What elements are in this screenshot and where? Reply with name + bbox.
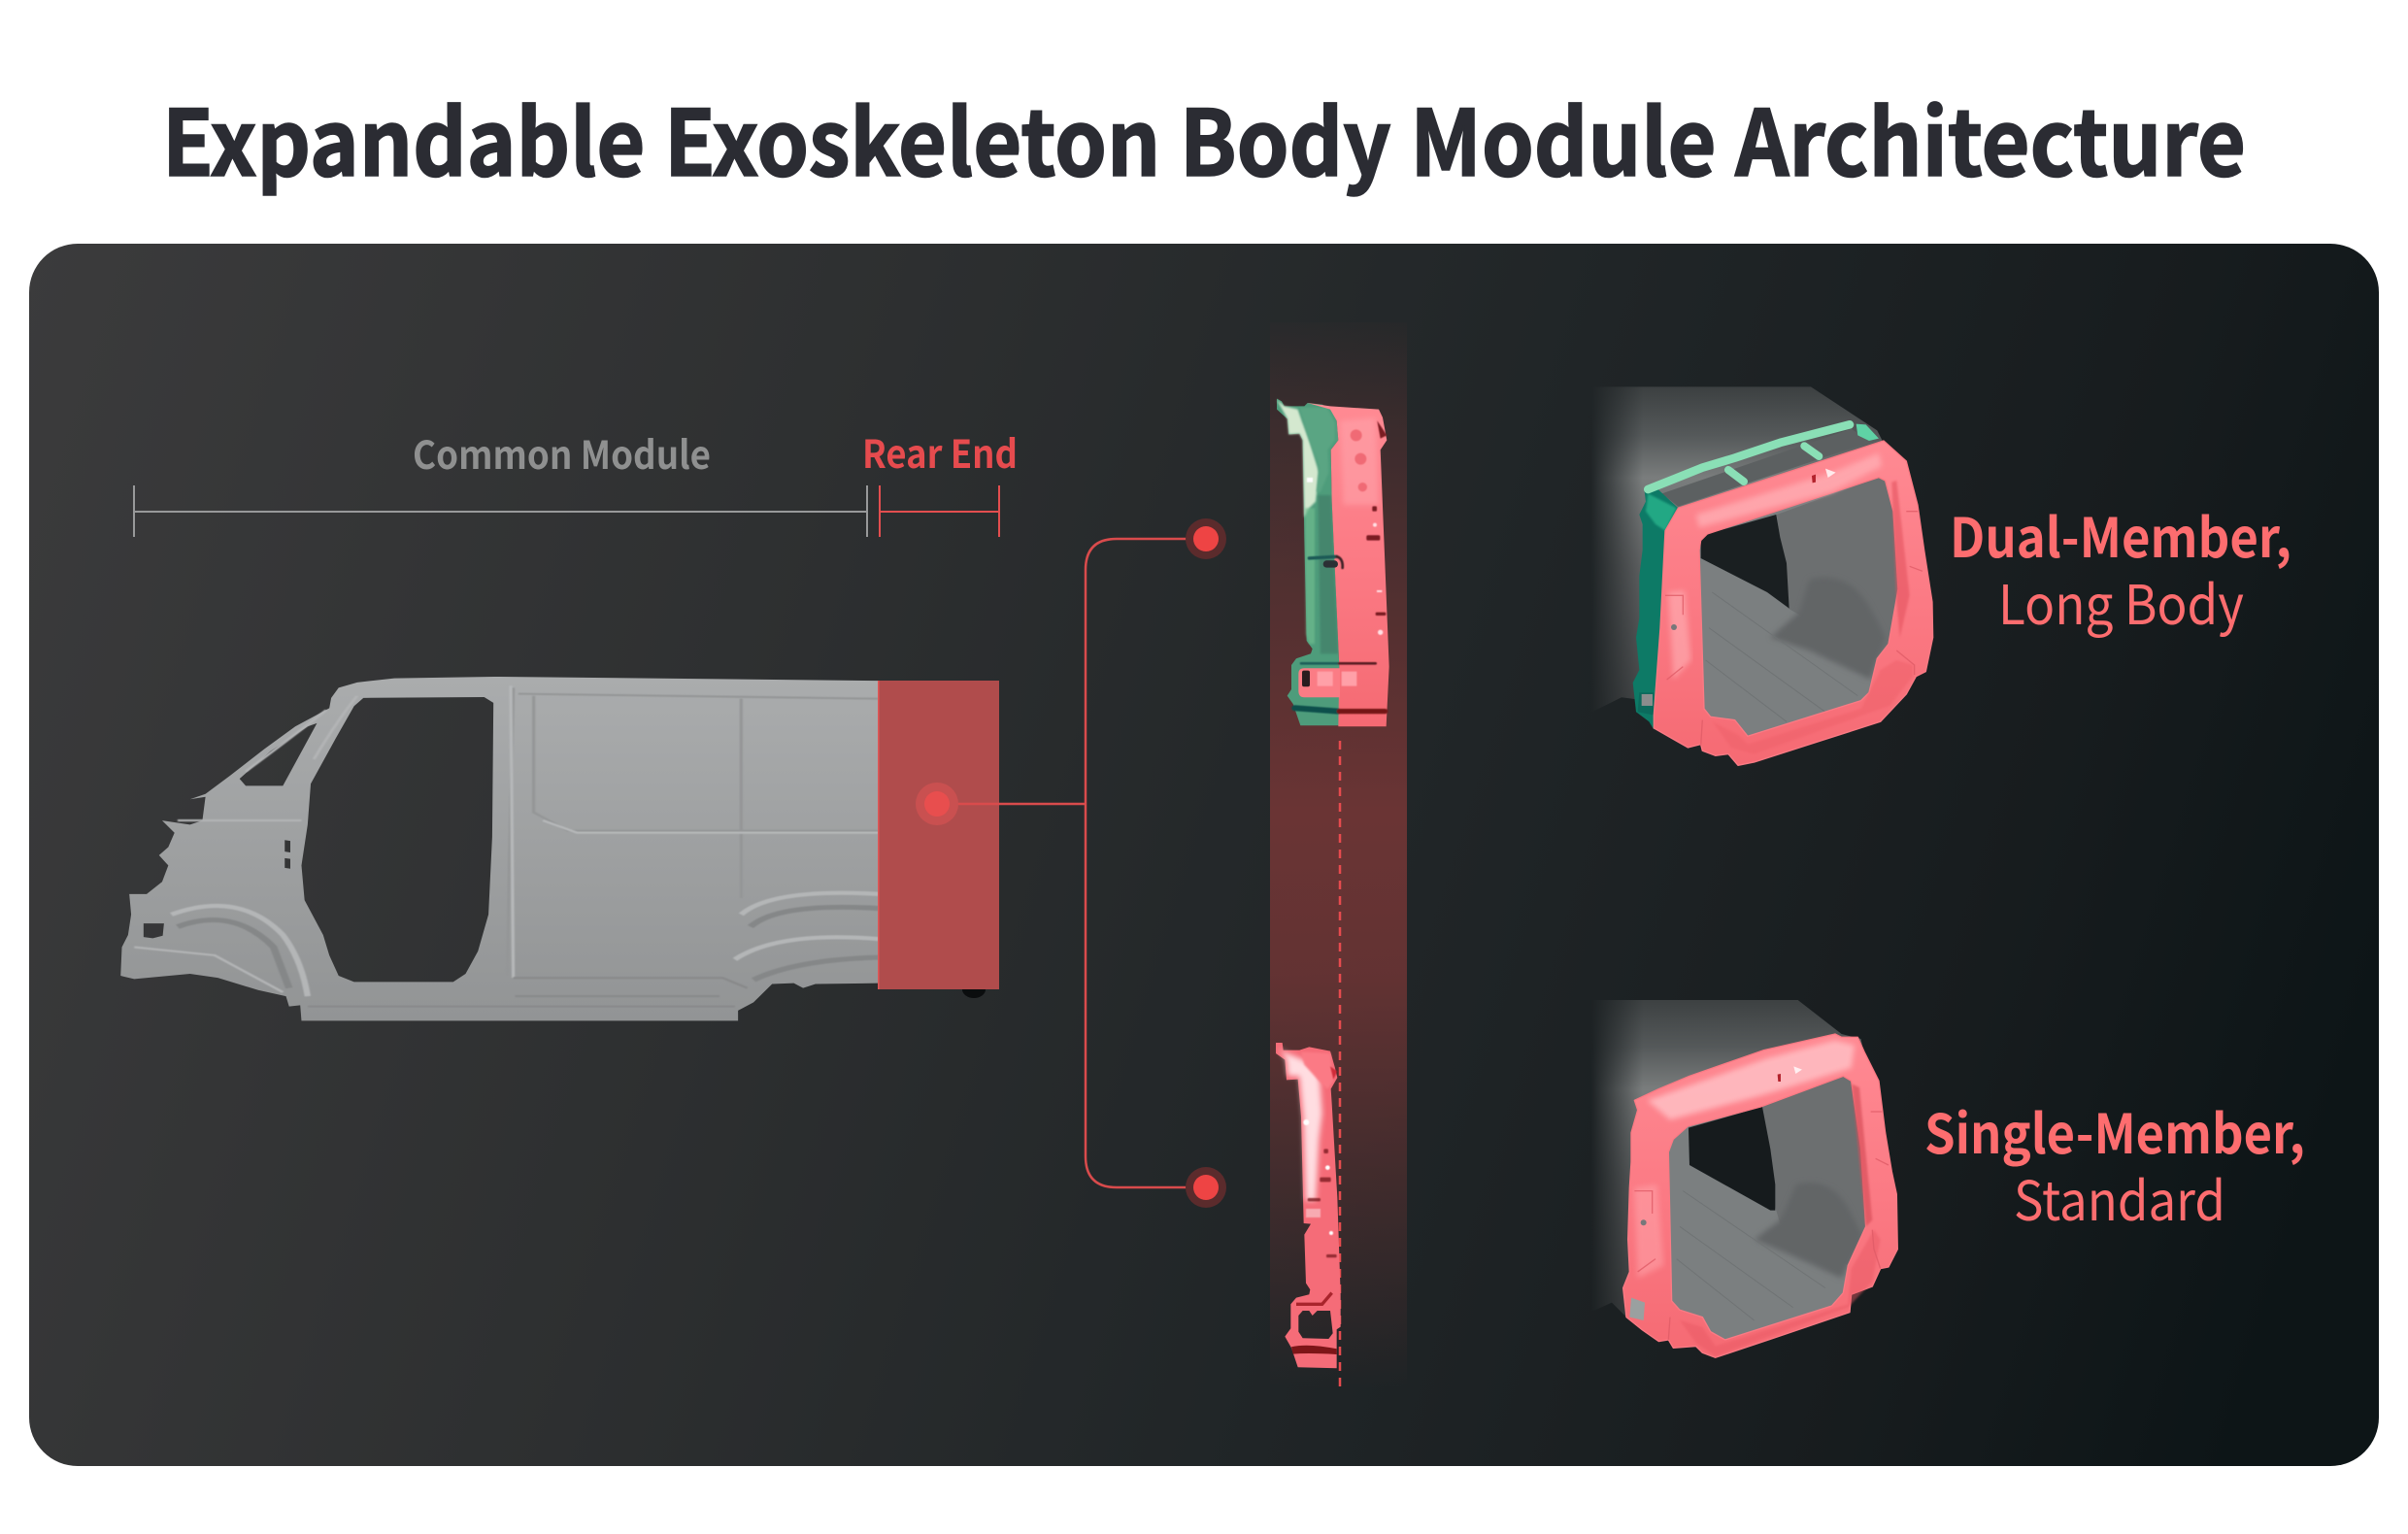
panel: dark background xyxy=(29,244,2379,1466)
rear frame: single member, standard xyxy=(1590,1000,1897,1357)
bracket: common module xyxy=(134,485,867,537)
label: common module: Common Module xyxy=(413,424,711,481)
label: single-member, standard: Standard xyxy=(2014,1158,2225,1237)
van body side module xyxy=(120,677,879,1020)
label: rear end: Rear End xyxy=(862,423,1018,480)
rear frame: dual member, long body xyxy=(1590,386,1933,765)
title: Expandable Exoskeleton Body Module Architecture xyxy=(162,71,2246,203)
connector line and dots xyxy=(916,518,1226,1208)
label: dual-member, long body: Long Body xyxy=(1998,562,2244,641)
bracket: rear end xyxy=(880,485,999,537)
label: single-member, standard xyxy=(1924,1091,2305,1237)
label: dual-member, long body xyxy=(1950,495,2291,641)
label: dual-member, long body: Dual-Member, xyxy=(1950,495,2291,574)
vertical glow band xyxy=(1270,322,1407,1410)
label: single-member, standard: Single-Member, xyxy=(1924,1091,2305,1170)
pillar section: single member xyxy=(1276,1043,1341,1368)
dashed centre line xyxy=(1339,741,1341,1386)
pillar section: dual member xyxy=(1277,399,1389,726)
rear end highlight block xyxy=(878,681,999,998)
